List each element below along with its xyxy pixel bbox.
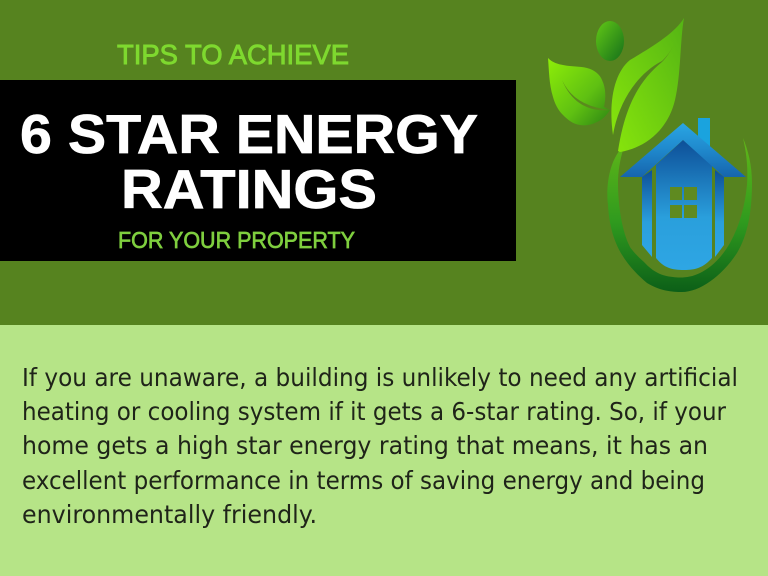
icon: right wing [715, 170, 724, 257]
title line 2: RATINGS [121, 158, 377, 220]
icon: right leaf, right half [618, 18, 684, 152]
header background [0, 0, 768, 325]
icon: left wing [642, 170, 652, 257]
body panel background [0, 325, 768, 576]
icon: roof [620, 123, 746, 177]
title banner [0, 80, 516, 261]
icon: eco house logo [548, 18, 752, 292]
body paragraph: excellent performance in terms of saving energy and being [22, 466, 705, 495]
body paragraph: home gets a high star energy rating that means, it has an [22, 431, 708, 460]
icon: left leaf [548, 58, 610, 125]
icon: small oval leaf [596, 21, 624, 61]
icon: left leaf vein [562, 80, 610, 110]
subheading: FOR YOUR PROPERTY [118, 227, 355, 253]
title line 1: 6 STAR ENERGY [20, 103, 478, 165]
icon: swoosh ring [607, 138, 752, 292]
body paragraph [22, 363, 738, 529]
body paragraph: heating or cooling system if it gets a 6-star rating. So, if your [22, 397, 727, 426]
icon: window [670, 187, 697, 218]
body paragraph: environmentally friendly. [22, 500, 317, 529]
icon: chimney [698, 118, 710, 146]
heading: tips to achieve: TIPS TO ACHIEVE [117, 39, 349, 70]
icon: house walls [656, 140, 712, 270]
icon: right leaf, left half [611, 18, 684, 135]
